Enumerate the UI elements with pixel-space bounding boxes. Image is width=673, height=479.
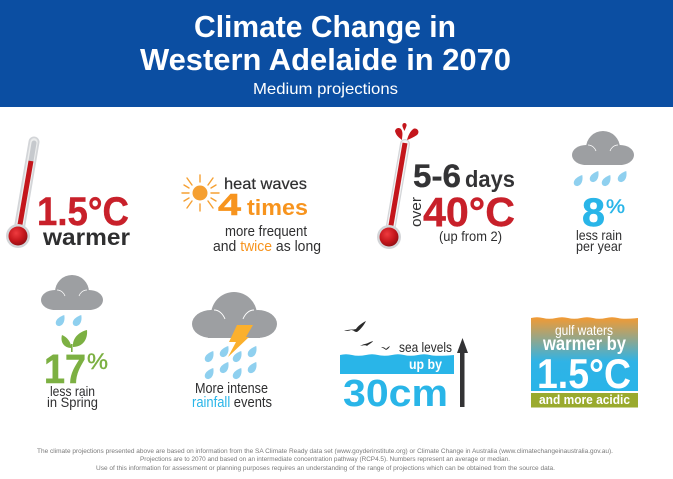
- icon: thermometer: [6, 142, 34, 248]
- text: more intense rainfall events: [192, 381, 272, 411]
- icon: cloud with drops: [41, 275, 103, 326]
- icon: green leaves: [61, 330, 87, 352]
- icon: rain cloud: [572, 131, 634, 186]
- title: Western Adelaide in 2070: [140, 42, 511, 77]
- figure: 17%: 17: [44, 346, 86, 392]
- figure: 30cm: 30cm: [343, 373, 448, 415]
- water gradient box: [531, 317, 638, 391]
- figure: 4 times: [218, 187, 308, 222]
- panel: 1.5C warmer: [6, 142, 130, 250]
- footnote: [37, 448, 613, 472]
- figure: 17%: %: [87, 349, 108, 374]
- figure: 5-6 days: 5-6: [413, 158, 461, 194]
- text: less rain per year: less rain: [576, 227, 622, 243]
- text: up by: up by: [409, 357, 442, 372]
- text: and more acidic: and more acidic: [539, 392, 630, 407]
- text: less rain per year: [576, 227, 622, 254]
- text: less rain in Spring: in Spring: [47, 394, 98, 410]
- text: more frequent and twice as long: more frequent: [225, 224, 307, 240]
- panel: 17% less rain in Spring: [41, 275, 108, 410]
- text: more frequent and twice as long: and twice as long: [213, 239, 321, 255]
- panel: sea levels: [340, 321, 468, 415]
- panel: gulf waters: [531, 317, 638, 408]
- text: less rain per year: per year: [576, 238, 622, 254]
- text: warmer by: warmer by: [542, 334, 626, 355]
- panel: more intense rainfall: [192, 292, 277, 411]
- text: sea levels: sea levels: [399, 339, 452, 355]
- panel: 8% less rain per year: [572, 131, 634, 254]
- icon: sun: [182, 175, 219, 211]
- sea band: [340, 354, 454, 374]
- text: less rain in Spring: [47, 383, 98, 410]
- subtitle: Medium projections: [253, 81, 398, 98]
- figure: 4 times: times: [247, 195, 308, 220]
- text: less rain in Spring: less rain: [50, 383, 95, 399]
- footnote: The climate projections presented above are based on information from the SA Climate Ready data set (www.goyderinstitute.org) or Climate Change in Australia (www.climatechangeinaustralia.gov.au).: [37, 448, 613, 455]
- panel: days over 40C: [377, 123, 515, 249]
- figure: 1.5C: 1.5°C: [537, 350, 631, 397]
- header banner: [0, 0, 673, 107]
- text: gulf waters: gulf waters: [555, 322, 613, 338]
- text: up from 2: (up from 2): [439, 229, 502, 244]
- figure: 8%: [582, 191, 625, 235]
- text: more frequent and twice as long: [213, 224, 321, 255]
- panel: heat waves: [182, 175, 321, 255]
- label: warmer: warmer: [42, 224, 130, 250]
- figure: 8%: 8: [582, 191, 605, 235]
- figure: 40C: 40°C: [423, 189, 515, 235]
- icon: birds: [344, 321, 390, 350]
- label: over: over: [408, 197, 425, 227]
- figure: 8%: %: [606, 197, 625, 218]
- icon: bursting thermometer: [377, 123, 418, 249]
- figure: 5-6 days: [413, 158, 515, 194]
- text: more intense rainfall events: More intense: [195, 381, 268, 397]
- text: more intense rainfall events: rainfall events: [192, 395, 272, 411]
- text: heat waves: heat waves: [224, 176, 307, 193]
- title: [140, 9, 511, 77]
- figure: 5-6 days: days: [465, 166, 515, 192]
- footnote: Use of this information for assessment or planning purposes requires an understanding of the range of projections which can be obtained from the source data.: [96, 465, 555, 472]
- title: Climate Change in: [194, 9, 456, 44]
- footnote: Projections are to 2070 and based on an intermediate concentration pathway (RCP4.5). Numbers represent an average or median.: [140, 456, 510, 463]
- icon: storm cloud: [192, 292, 277, 338]
- figure: 4 times: 4: [218, 187, 242, 222]
- arrow: rising sea level: [457, 338, 468, 407]
- acidic band: [531, 393, 638, 408]
- figure: 1.5C: 1.5°C: [37, 190, 129, 234]
- icon: lightning bolt: [228, 325, 253, 357]
- icon: rain drops: [205, 346, 257, 379]
